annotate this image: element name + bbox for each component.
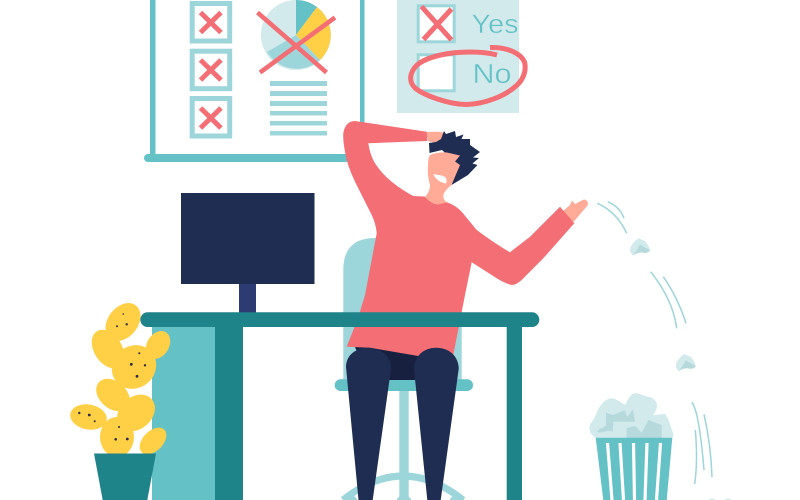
monitor <box>181 193 314 313</box>
board frame <box>144 0 364 162</box>
chair post <box>399 385 409 500</box>
hand on the head <box>426 132 447 143</box>
monitor screen <box>181 193 314 284</box>
big cross over pie chart <box>258 12 335 72</box>
bucket stripes <box>608 443 660 500</box>
left leg <box>346 348 391 500</box>
checklist boxes with crosses <box>192 4 230 136</box>
mouth <box>433 174 447 184</box>
label no: No <box>472 58 512 89</box>
paper pile <box>589 393 674 438</box>
open hand <box>562 200 588 222</box>
yes checkbox <box>418 6 454 42</box>
monitor stand <box>239 255 256 313</box>
text lines <box>270 81 327 136</box>
crumpled paper on the floor <box>709 498 731 500</box>
cabinet drawer under desk <box>152 327 215 500</box>
pot <box>94 454 156 500</box>
right leg <box>414 348 459 500</box>
chair casters <box>342 495 465 500</box>
paper shadow left <box>597 409 635 432</box>
wall board with checklist and pie chart <box>144 0 364 162</box>
pie chart <box>261 0 331 70</box>
desk left leg <box>215 327 243 500</box>
desk <box>140 312 539 500</box>
cactus spines <box>78 313 146 441</box>
desk top <box>140 312 539 327</box>
red circle around no <box>411 47 525 104</box>
yes/no poster <box>397 0 525 113</box>
label yes: Yes <box>472 9 518 39</box>
office chair <box>335 238 473 500</box>
potted cactus <box>68 296 243 500</box>
person <box>343 121 588 500</box>
wastepaper bucket <box>589 393 674 500</box>
face and neck <box>424 152 460 206</box>
desk right leg <box>507 327 522 500</box>
hair <box>429 131 480 185</box>
poster background <box>397 0 519 113</box>
no checkbox <box>418 55 454 91</box>
pink sweater <box>343 121 574 356</box>
chair base <box>343 476 463 500</box>
trousers seat <box>354 345 452 380</box>
chair back <box>343 238 462 381</box>
cross on yes <box>422 6 452 40</box>
paper shadow right <box>627 420 662 438</box>
bucket body <box>596 438 672 500</box>
cactus pads <box>68 296 175 459</box>
crumpled paper in the air, upper <box>630 238 650 256</box>
chair seat bar <box>335 379 473 391</box>
crumpled paper in the air, lower <box>676 354 696 371</box>
motion lines <box>597 202 712 484</box>
